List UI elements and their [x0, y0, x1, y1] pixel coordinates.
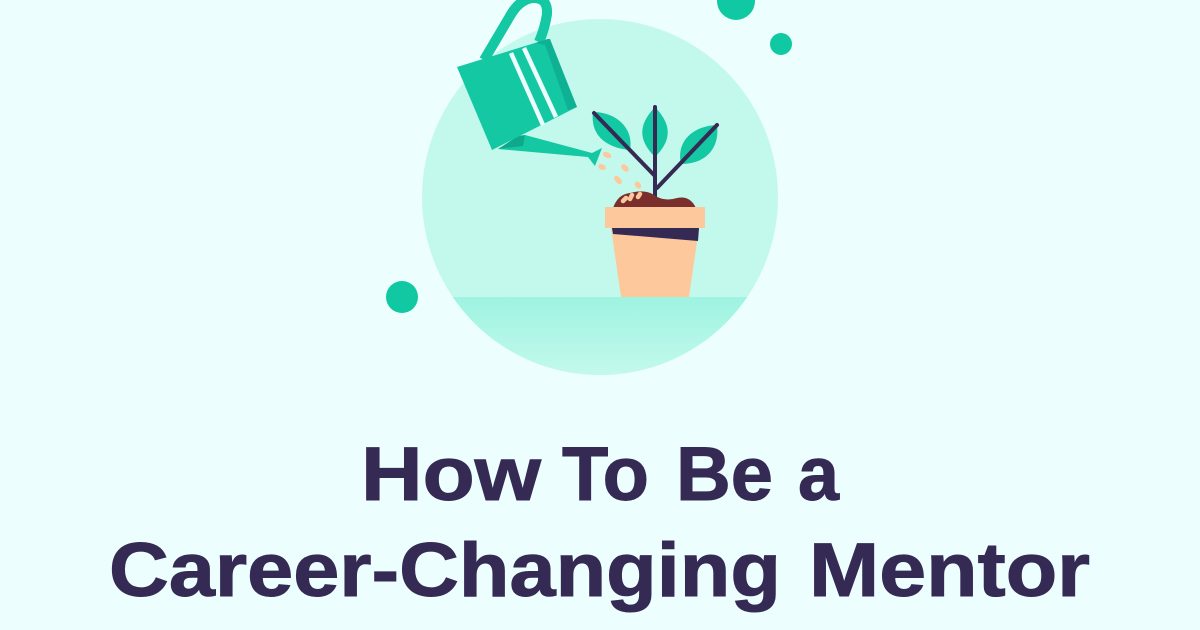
title: How [361, 432, 542, 517]
title: Mentor [809, 528, 1090, 613]
icon: soil [613, 191, 696, 208]
infographic canvas [112, 0, 1090, 612]
icon: plant leaves and stems [593, 107, 717, 198]
illustration: background circle with table [420, 19, 780, 377]
title [109, 432, 1090, 613]
title: Career-Changing [109, 528, 781, 613]
decorative dots [386, 0, 792, 313]
icon: flower pot [605, 207, 705, 297]
icon: watering can [457, 0, 602, 166]
title: Be [676, 432, 773, 517]
title: To [562, 432, 649, 517]
icon: water drops [597, 151, 643, 190]
title: a [798, 432, 840, 517]
